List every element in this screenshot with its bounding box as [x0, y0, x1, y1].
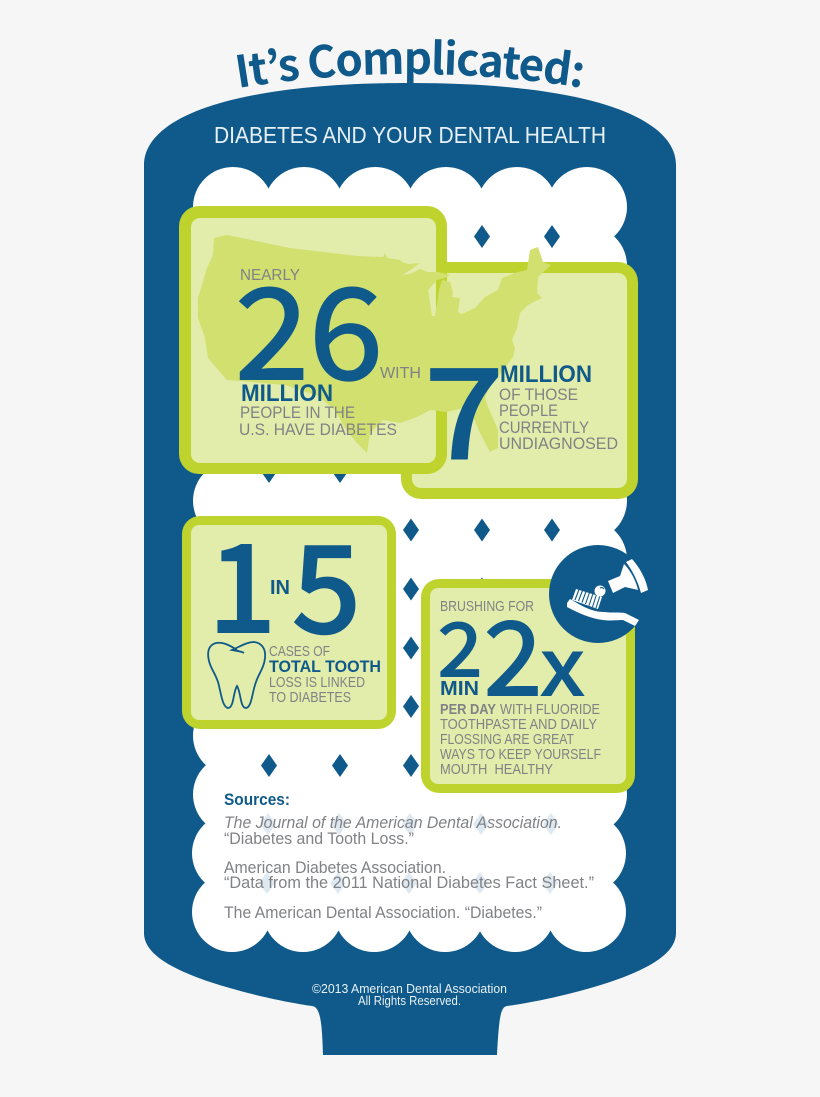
panel: brushing: BRUSHING FOR — [440, 598, 534, 615]
panel: brushing: MIN — [440, 678, 479, 700]
panel: 1 in 5: IN — [270, 577, 290, 599]
sources — [224, 790, 594, 922]
text: 26 million statistic: MILLION — [241, 380, 333, 407]
white scalloped panel — [192, 167, 627, 952]
copyright — [312, 982, 507, 1008]
text: 7 million statistic: UNDIAGNOSED — [499, 434, 618, 453]
panel: 1 in 5: LOSS IS LINKED — [269, 674, 365, 691]
sources: The Journal of the American Dental Association. — [224, 813, 562, 832]
icon: tooth — [208, 642, 265, 708]
text: 7 million statistic: CURRENTLY — [499, 418, 589, 437]
text: 7 million statistic: OF THOSE — [499, 385, 578, 404]
panel: brushing: PER DAY — [440, 701, 496, 718]
sources: The American Dental Association. “Diabetes.” — [224, 903, 542, 922]
title — [236, 39, 582, 88]
panel: 1 in 5: TOTAL TOOTH — [269, 657, 381, 676]
text: 26 million statistic: NEARLY — [240, 267, 300, 284]
faint diamonds behind sources — [259, 813, 559, 894]
panel: brushing: MOUTH HEALTHY — [440, 761, 553, 778]
text: 26 million statistic: PEOPLE IN THE — [240, 403, 355, 422]
panel: brushing: WAYS TO KEEP YOURSELF — [440, 746, 601, 763]
panel: brushing: 2 — [438, 591, 482, 698]
diamond pattern — [261, 225, 560, 777]
text: with: WITH — [380, 365, 421, 382]
sources: American Diabetes Association. — [224, 858, 446, 877]
map of the United States — [198, 235, 551, 453]
panel: 1 in 5 — [182, 494, 396, 729]
text: 26 million statistic: 26 — [235, 234, 383, 416]
panel: brushing: WITH FLUORIDE — [500, 701, 600, 718]
text: 7 million statistic — [425, 314, 618, 494]
text: 7 million statistic: MILLION — [500, 361, 592, 388]
copyright: ©2013 American Dental Association — [312, 982, 507, 996]
panel: brushing: 2 — [484, 578, 542, 725]
title: It’s Complicated: — [236, 39, 582, 88]
sources: “Data from the 2011 National Diabetes Fact Sheet.” — [224, 873, 594, 892]
panel: 1 in 5: TO DIABETES — [269, 689, 351, 706]
text: 7 million statistic: 7 — [425, 314, 503, 494]
mouthwash bottle background — [144, 83, 676, 1055]
panel: 1 in 5: 1 — [209, 494, 275, 666]
text: 7 million statistic: PEOPLE — [499, 401, 558, 420]
panel: 1 in 5: CASES OF — [269, 643, 330, 660]
icon: toothbrush and paste — [549, 545, 648, 643]
text: 26 million statistic: U.S. HAVE DIABETES — [239, 420, 397, 439]
panel: brushing: TOOTHPASTE AND DAILY — [440, 716, 597, 733]
panel: 7 million box — [401, 262, 638, 499]
sources: “Diabetes and Tooth Loss.” — [224, 829, 414, 848]
panel: brushing: FLOSSING ARE GREAT — [440, 731, 574, 748]
panel: brushing — [421, 578, 635, 793]
panel: 1 in 5: 5 — [293, 495, 360, 667]
subtitle: DIABETES AND YOUR DENTAL HEALTH — [214, 122, 606, 148]
copyright: All Rights Reserved. — [358, 994, 461, 1008]
sources: Sources: — [224, 790, 290, 809]
panel: 26 million box — [179, 206, 447, 474]
panel: brushing: x — [541, 606, 584, 718]
